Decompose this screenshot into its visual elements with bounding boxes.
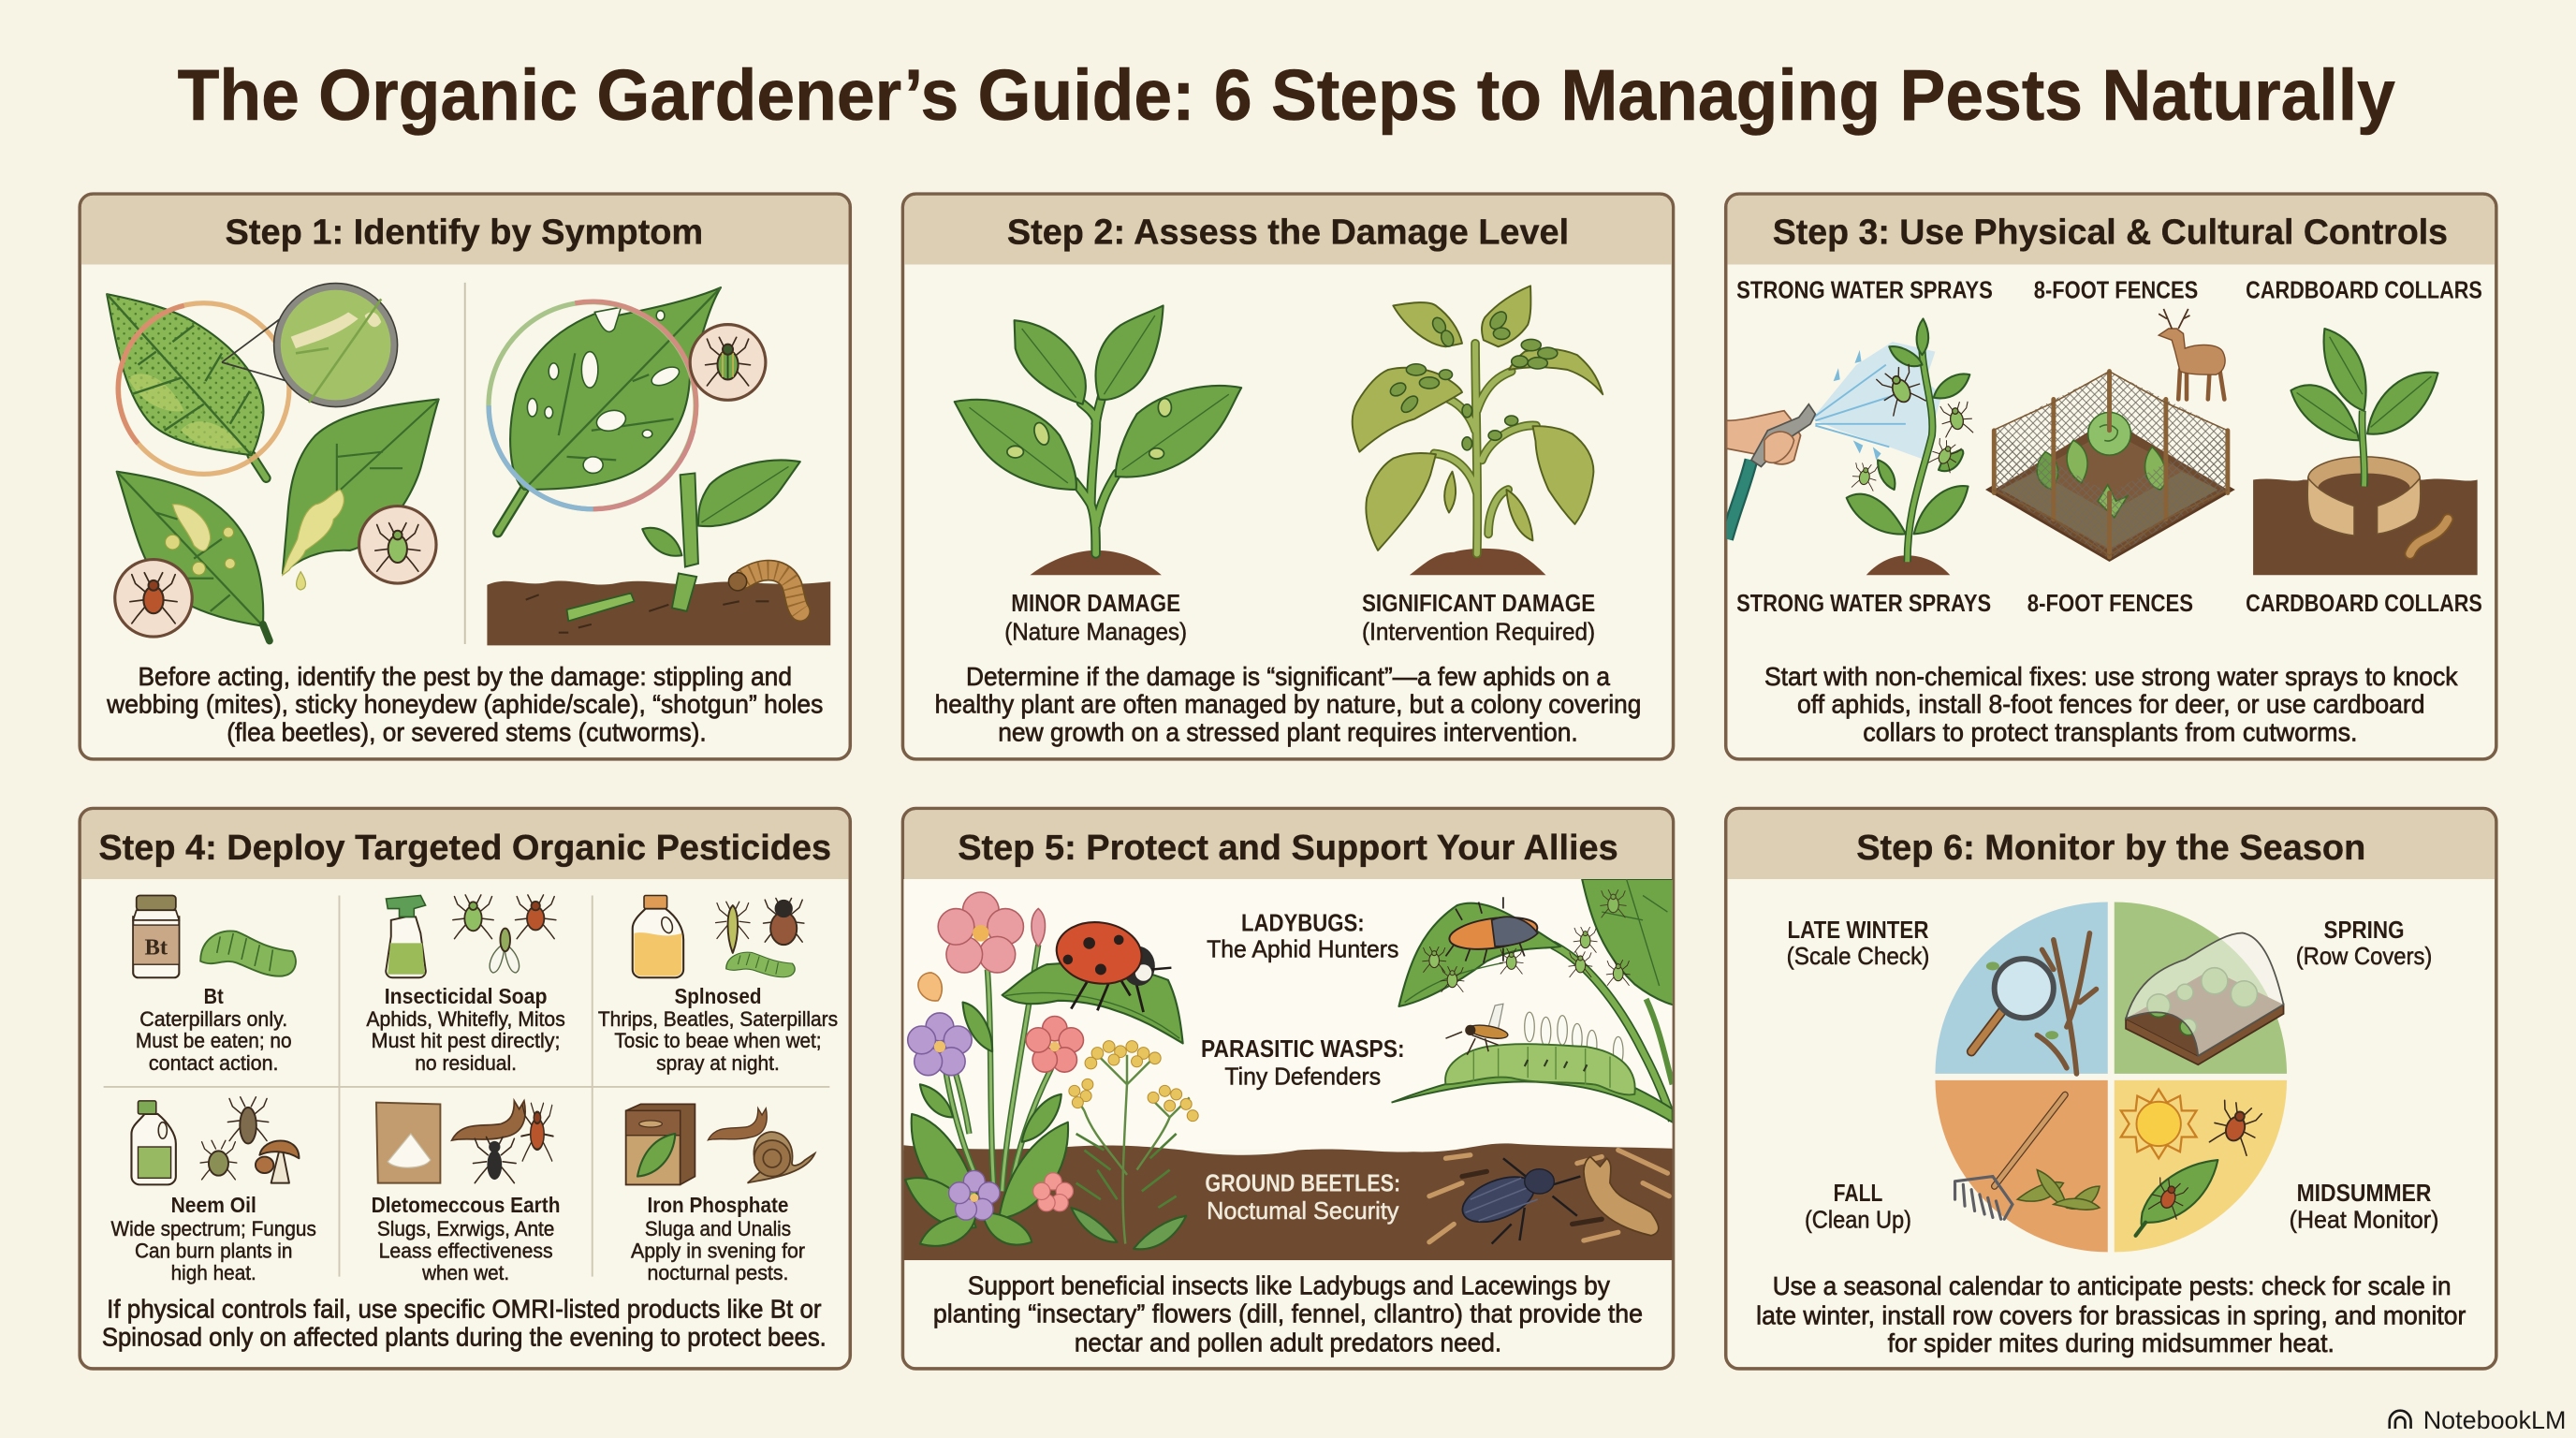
heading: step 1: Step 1: Identify by Symptom	[225, 213, 703, 252]
quadrant: spring	[2115, 902, 2287, 1074]
icon: honeydew leaf with mite	[115, 472, 270, 640]
text: step 2 description: healthy plant are often managed by nature, but a colony covering	[935, 690, 1641, 719]
text: step 5 description: planting “insectary” flowers (dill, fennel, cllantro) that provide the	[933, 1299, 1643, 1328]
text: step 3 description: Start with non-chemical fixes: use strong water sprays to knock	[1764, 662, 2458, 691]
item: iron phosphate: Iron Phosphate	[648, 1193, 788, 1217]
label: late winter: LATE WINTER	[1788, 917, 1928, 944]
item: diatomaceous earth: when wet.	[421, 1261, 509, 1284]
labels: bottom row of controls: STRONG WATER SPRAYS	[1736, 591, 1991, 617]
item: spinosad: Thrips, Beatles, Saterpillars	[598, 1007, 838, 1031]
text: step 3 description: collars to protect transplants from cutworms.	[1863, 718, 2358, 747]
labels: bottom row of controls	[1736, 591, 2482, 617]
item: insecticidal soap: no residual.	[415, 1051, 517, 1075]
item: Bt: Bt	[204, 984, 224, 1008]
heading: step 6: Step 6: Monitor by the Season	[1856, 828, 2365, 867]
item: Bt: Must be eaten; no	[136, 1029, 292, 1052]
label: parasitic wasps	[1201, 1036, 1405, 1090]
labels: bottom row of controls: CARDBOARD COLLARS	[2246, 591, 2482, 617]
item: neem oil	[111, 1097, 316, 1284]
labels: top row of controls	[1736, 278, 2482, 304]
item: insecticidal soap: Must hit pest directly;	[372, 1029, 561, 1052]
icon: sticky leaf with aphid	[283, 399, 439, 590]
text: step 2 description	[935, 662, 1641, 747]
heading: step 4: Step 4: Deploy Targeted Organic Pesticides	[98, 828, 831, 867]
label: midsummer: MIDSUMMER	[2297, 1181, 2431, 1207]
heading: step 3: Step 3: Use Physical & Cultural Controls	[1773, 213, 2448, 252]
text: step 1 description: webbing (mites), sticky honeydew (aphide/scale), “shotgun” holes	[106, 690, 823, 719]
ladybug on leaf	[1003, 917, 1183, 1043]
label: spring: SPRING	[2324, 917, 2405, 944]
icon: hose spraying plant with aphids	[1727, 318, 1974, 575]
quadrant: late winter	[1935, 902, 2108, 1074]
text: step 2 description: Determine if the damage is “significant”—a few aphids on a	[966, 662, 1610, 691]
label: ground beetles: GROUND BEETLES:	[1205, 1170, 1400, 1196]
labels: damage levels: (Intervention Required)	[1362, 619, 1595, 645]
label: ground beetles: Noctumal Security	[1207, 1198, 1399, 1225]
label: parasitic wasps: Tiny Defenders	[1224, 1064, 1381, 1090]
text: step 4 description: If physical controls fail, use specific OMRI-listed products like Bt or	[107, 1295, 822, 1324]
item: iron phosphate: Sluga and Unalis	[645, 1217, 791, 1240]
text: step 2 description: new growth on a stressed plant requires intervention.	[998, 718, 1578, 747]
label: fall: FALL	[1834, 1181, 1882, 1207]
label: ladybugs	[1207, 911, 1398, 963]
item: Bt	[133, 895, 296, 1075]
labels: damage levels	[1004, 591, 1595, 645]
text: step 1 description	[106, 662, 823, 747]
item: iron phosphate: Apply in svening for	[631, 1239, 805, 1262]
item: insecticidal soap: Insecticidal Soap	[385, 984, 547, 1008]
text: step 6 description	[1756, 1271, 2466, 1357]
labels: top row of controls: 8-FOOT FENCES	[2034, 278, 2198, 304]
text: step 1 description: (flea beetles), or severed stems (cutworms).	[227, 718, 707, 747]
item: iron phosphate	[626, 1104, 815, 1284]
text: step 6 description: late winter, install row covers for brassicas in spring, and monitor	[1756, 1300, 2466, 1329]
item: neem oil: Can burn plants in	[135, 1239, 292, 1262]
item: neem oil: high heat.	[171, 1261, 256, 1284]
dill and fennel umbels	[1069, 1041, 1198, 1249]
item: diatomaceous earth: Leass effectiveness	[379, 1239, 553, 1262]
label: midsummer	[2290, 1181, 2438, 1234]
panel: step 5 protect and support allies	[902, 808, 1676, 1369]
item: Bt: Caterpillars only.	[139, 1007, 287, 1031]
item: Bt: contact action.	[149, 1051, 279, 1075]
item: spinosad	[598, 895, 838, 1075]
flowers: insectary plants	[905, 892, 1083, 1246]
icon: shotgun holes leaf with beetle	[489, 287, 766, 533]
label: parasitic wasps: PARASITIC WASPS:	[1201, 1036, 1405, 1063]
label: ground beetles	[1205, 1170, 1400, 1225]
icon: cardboard collar around transplant	[2253, 329, 2478, 575]
label: fall	[1805, 1181, 1911, 1234]
heading: step 5: Step 5: Protect and Support Your Allies	[958, 828, 1618, 867]
labels: damage levels: MINOR DAMAGE	[1011, 591, 1180, 617]
icon: infested wilting plant with significant damage	[1353, 286, 1603, 575]
item: spinosad: Splnosed	[674, 984, 762, 1008]
label: midsummer: (Heat Monitor)	[2290, 1208, 2438, 1234]
labels: top row of controls: STRONG WATER SPRAYS	[1736, 278, 1993, 304]
text: step 5 description: Support beneficial insects like Ladybugs and Lacewings by	[968, 1270, 1610, 1299]
quadrant: midsummer	[2115, 1080, 2287, 1252]
logo: NotebookLM: NotebookLM	[2423, 1405, 2566, 1434]
item: iron phosphate: nocturnal pests.	[648, 1261, 788, 1284]
text: step 1 description: Before acting, identify the pest by the damage: stippling and	[138, 662, 792, 691]
panel: step 4 targeted organic pesticides	[80, 808, 850, 1369]
text: step 3 description	[1764, 662, 2458, 747]
panel: step 2 assess the damage level	[902, 194, 1674, 759]
label: spring	[2296, 917, 2432, 970]
text: step 3 description: off aphids, install 8-foot fences for deer, or use cardboard	[1797, 690, 2424, 719]
ground beetle, slug and debris	[1429, 1151, 1669, 1244]
text: step 6 description: Use a seasonal calendar to anticipate pests: check for scale in	[1773, 1271, 2452, 1300]
label: ladybugs: The Aphid Hunters	[1207, 937, 1398, 963]
label: late winter	[1787, 917, 1929, 970]
text: step 4 description	[102, 1295, 827, 1351]
parasitic wasp and caterpillar on branch	[1392, 1004, 1673, 1123]
item: insecticidal soap	[366, 895, 565, 1075]
heading: step 2: Step 2: Assess the Damage Level	[1007, 213, 1569, 252]
label: late winter: (Scale Check)	[1787, 944, 1929, 970]
item: neem oil: Wide spectrum; Fungus	[111, 1217, 316, 1240]
illustration: garden scene with beneficial insects	[903, 879, 1676, 1260]
item: spinosad: Tosic to beae when wet;	[614, 1029, 822, 1052]
panel: step 1 identify by symptom	[80, 194, 850, 759]
labels: top row of controls: CARDBOARD COLLARS	[2246, 278, 2482, 304]
text: step 5 description: nectar and pollen adult predators need.	[1075, 1328, 1501, 1357]
icon: fenced garden bed and deer	[1988, 309, 2232, 560]
item: spinosad: spray at night.	[656, 1051, 780, 1075]
labels: damage levels: (Nature Manages)	[1004, 619, 1187, 645]
item: Bt: Bt	[145, 935, 168, 961]
label: spring: (Row Covers)	[2296, 944, 2432, 970]
labels: damage levels: SIGNIFICANT DAMAGE	[1362, 591, 1595, 617]
text: step 5 description	[933, 1270, 1643, 1357]
grid dividers	[104, 895, 829, 1277]
title: The Organic Gardener’s Guide: 6 Steps to Managing Pests Naturally	[178, 55, 2395, 136]
panel: step 3 physical and cultural controls	[1726, 194, 2496, 759]
icon: healthy plant with minor damage	[955, 305, 1241, 575]
item: diatomaceous earth: Dletomeccous Earth	[372, 1193, 561, 1217]
item: neem oil: Neem Oil	[171, 1193, 256, 1217]
icon: severed seedling and cutworm in soil	[487, 461, 830, 645]
icon: stippled leaf with magnifier	[107, 284, 398, 478]
divider	[464, 283, 466, 644]
label: fall: (Clean Up)	[1805, 1208, 1911, 1234]
soil band	[903, 1143, 1673, 1260]
panel: step 6 monitor by the season	[1726, 808, 2496, 1369]
aphids and ladybug larva on leaf	[1398, 879, 1676, 1121]
quadrant: fall	[1935, 1080, 2108, 1252]
label: ladybugs: LADYBUGS:	[1241, 911, 1365, 937]
item: diatomaceous earth: Slugs, Exrwigs, Ante	[377, 1217, 554, 1240]
text: step 4 description: Spinosad only on affected plants during the evening to protect bees.	[102, 1322, 827, 1351]
item: insecticidal soap: Aphids, Whitefly, Mitos	[366, 1007, 565, 1031]
item: diatomaceous earth	[372, 1101, 561, 1284]
labels: bottom row of controls: 8-FOOT FENCES	[2027, 591, 2193, 617]
text: step 6 description: for spider mites during midsummer heat.	[1888, 1328, 2334, 1357]
